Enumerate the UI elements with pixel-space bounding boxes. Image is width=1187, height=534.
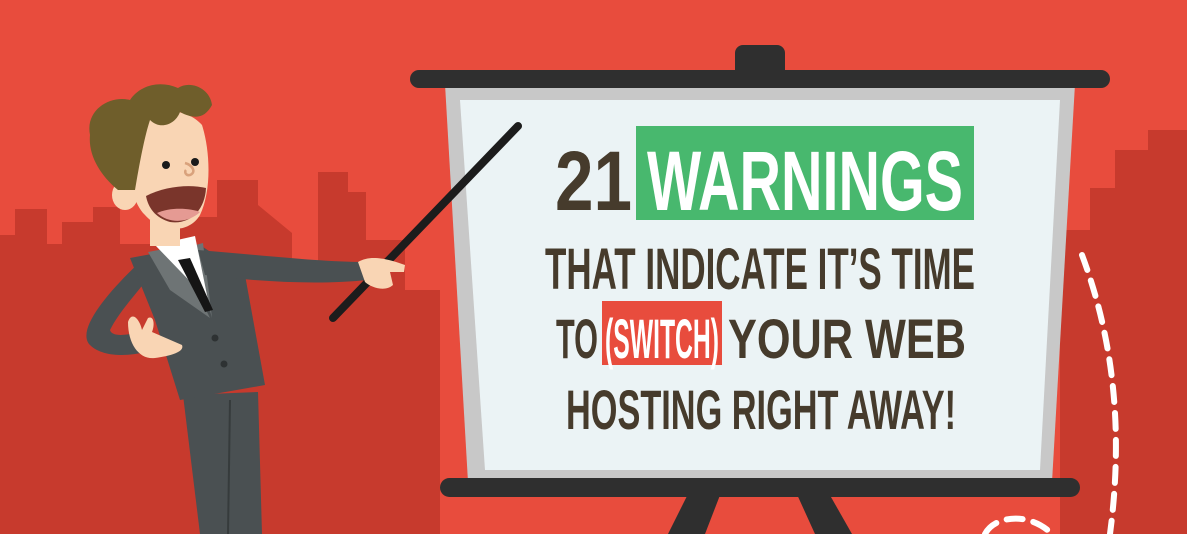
hair bbox=[89, 84, 212, 190]
line 3 bbox=[556, 307, 966, 370]
red highlight box bbox=[602, 301, 722, 365]
torso bbox=[130, 245, 265, 400]
neck bbox=[150, 220, 180, 246]
line 4: HOSTING RIGHT AWAY! bbox=[566, 378, 956, 441]
line 3: (SWITCH) bbox=[605, 307, 719, 370]
eyes bbox=[162, 161, 170, 169]
screen inner bbox=[460, 100, 1060, 470]
mouth bbox=[146, 186, 206, 222]
screen gray frame bbox=[445, 84, 1075, 482]
buttons bbox=[212, 334, 218, 342]
legs bbox=[183, 392, 262, 534]
nose bbox=[185, 163, 193, 175]
dashed path arrow bbox=[985, 255, 1116, 534]
city skyline right bbox=[1060, 130, 1187, 534]
heading 21 WARNINGS: 21 bbox=[555, 134, 632, 228]
green highlight box bbox=[636, 126, 974, 220]
knob bbox=[735, 45, 785, 81]
hand holding bbox=[358, 258, 405, 289]
back arm bbox=[86, 262, 150, 355]
shirt and tie bbox=[155, 236, 208, 300]
projector screen bbox=[410, 45, 1110, 534]
legs bbox=[668, 490, 722, 534]
waving hand bbox=[128, 317, 182, 358]
pointing arm bbox=[198, 250, 367, 282]
line 3: YOUR WEB bbox=[728, 307, 966, 370]
line 3: TO bbox=[556, 307, 598, 370]
heading 21 WARNINGS bbox=[555, 134, 963, 228]
lapels bbox=[148, 247, 210, 318]
top bar bbox=[410, 70, 1110, 88]
bottom bar bbox=[440, 478, 1080, 497]
pointer stick bbox=[333, 126, 518, 318]
ear bbox=[112, 180, 138, 210]
title text bbox=[545, 126, 975, 441]
man character bbox=[86, 84, 518, 534]
city skyline left bbox=[0, 172, 440, 534]
heading 21 WARNINGS: WARNINGS bbox=[647, 134, 963, 228]
head bbox=[129, 111, 208, 229]
